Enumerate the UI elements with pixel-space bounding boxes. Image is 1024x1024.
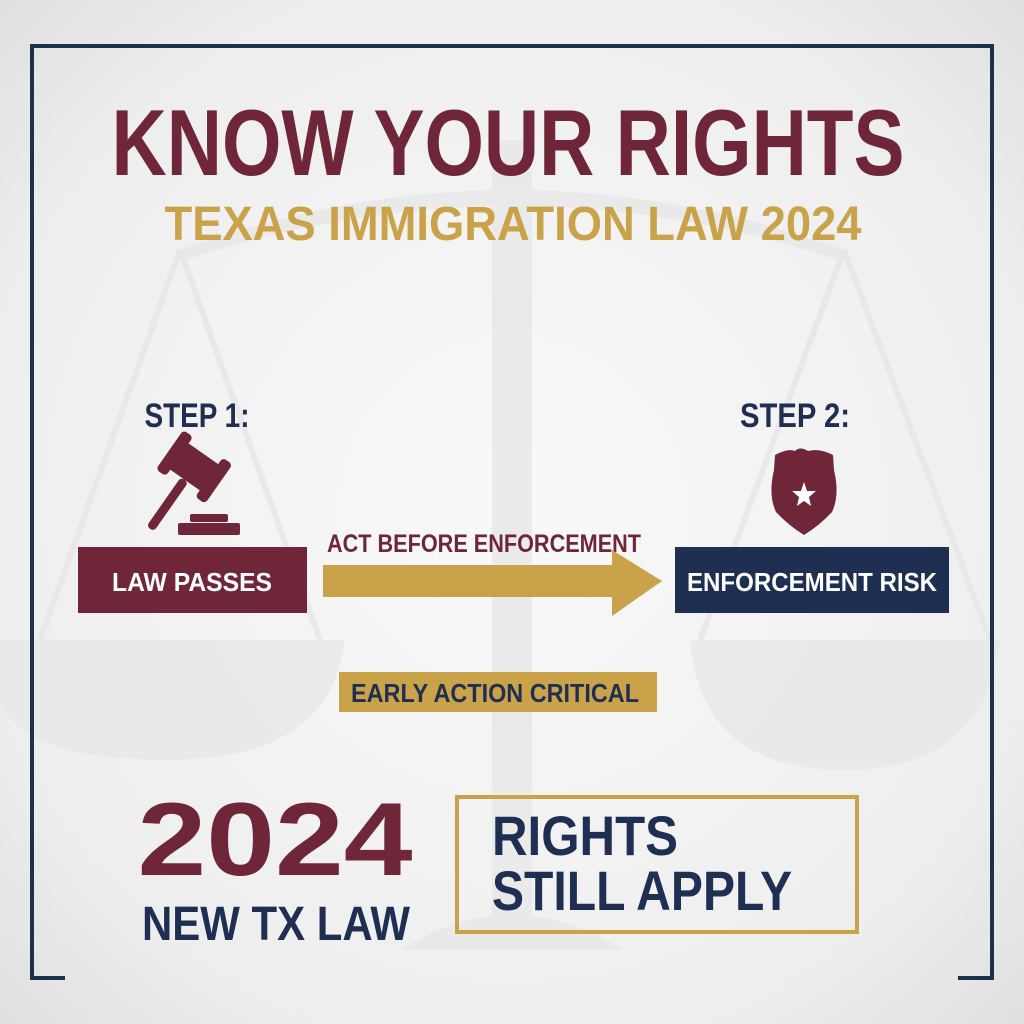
- icon: gavel: [126, 430, 240, 546]
- subtitle: TEXAS IMMIGRATION LAW 2024: [164, 198, 862, 251]
- stat: 2024 new tx law: NEW TX LAW: [142, 898, 411, 951]
- step 1 label: STEP 1:: [144, 397, 250, 435]
- step 2 label: STEP 2:: [740, 397, 850, 435]
- arrow label: ACT BEFORE ENFORCEMENT: [327, 530, 641, 558]
- stat: 2024 new tx law: 2024: [138, 782, 413, 898]
- callout: rights still apply: RIGHTS: [492, 804, 678, 867]
- watermark: scales of justice: [0, 140, 1000, 950]
- callout: early action critical: EARLY ACTION CRITICAL: [351, 678, 639, 708]
- box: enforcement risk: [675, 547, 949, 613]
- box: law passes: LAW PASSES: [112, 567, 272, 597]
- callout: rights still apply: STILL APPLY: [492, 859, 792, 922]
- callout: rights still apply: [457, 797, 857, 932]
- arrow: [323, 550, 662, 616]
- icon: badge: [771, 448, 837, 535]
- stat: 2024 new tx law: [138, 782, 413, 951]
- callout: early action critical: [339, 672, 657, 712]
- box: enforcement risk: ENFORCEMENT RISK: [687, 567, 937, 597]
- box: law passes: [78, 547, 307, 613]
